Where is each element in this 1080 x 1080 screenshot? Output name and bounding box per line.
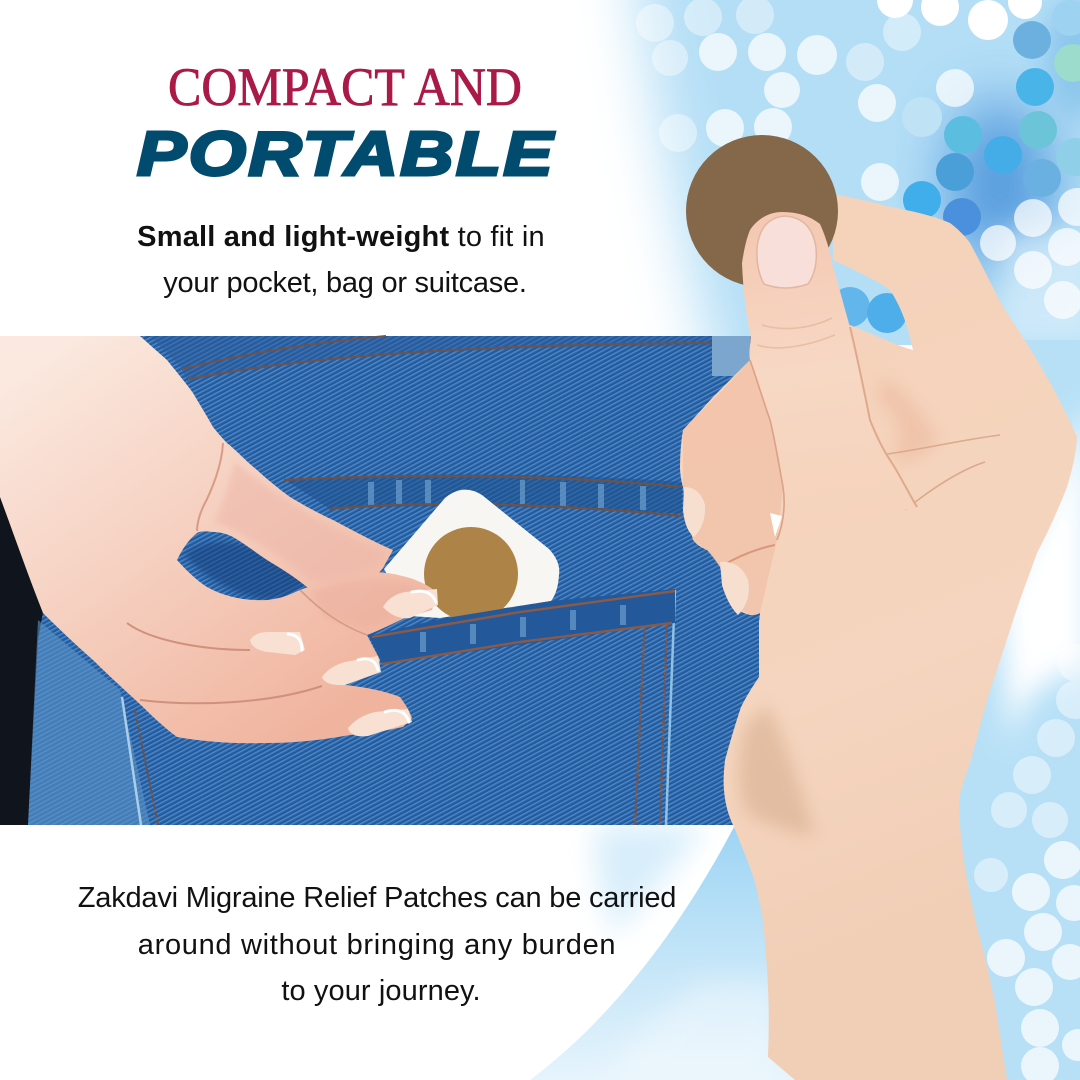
- right hand: index finger, palm, wrist and curled fingers: [680, 194, 1077, 1080]
- text block: product description: Zakdavi Migraine Relief Patches can be carried: [78, 882, 676, 914]
- text block: product description: around without bringing any burden: [138, 928, 616, 960]
- brown patch held by fingers: [686, 135, 838, 287]
- fingernails: [250, 589, 438, 736]
- text block: small and light-weight: Small and light-weight to fit in: [137, 221, 545, 253]
- text block: small and light-weight: [137, 221, 545, 299]
- heading: portable: PORTABLE: [137, 120, 555, 189]
- fingernails on curled fingers: [683, 487, 749, 615]
- heading: compact and: COMPACT AND: [168, 57, 522, 117]
- thumb holding patch: [742, 212, 917, 540]
- text block: product description: [78, 882, 676, 1007]
- white gap between fingers: [770, 513, 782, 537]
- left hand holding patch: [0, 336, 438, 743]
- background: lower bokeh: [530, 340, 1080, 1080]
- photo: denim jeans with pocket: [0, 336, 775, 825]
- patch: white square in pocket with brown circle: [369, 490, 675, 664]
- text block: product description: to your journey.: [281, 975, 481, 1007]
- text block: small and light-weight: your pocket, bag or suitcase.: [163, 267, 527, 299]
- background: upper bokeh: [300, 0, 1080, 420]
